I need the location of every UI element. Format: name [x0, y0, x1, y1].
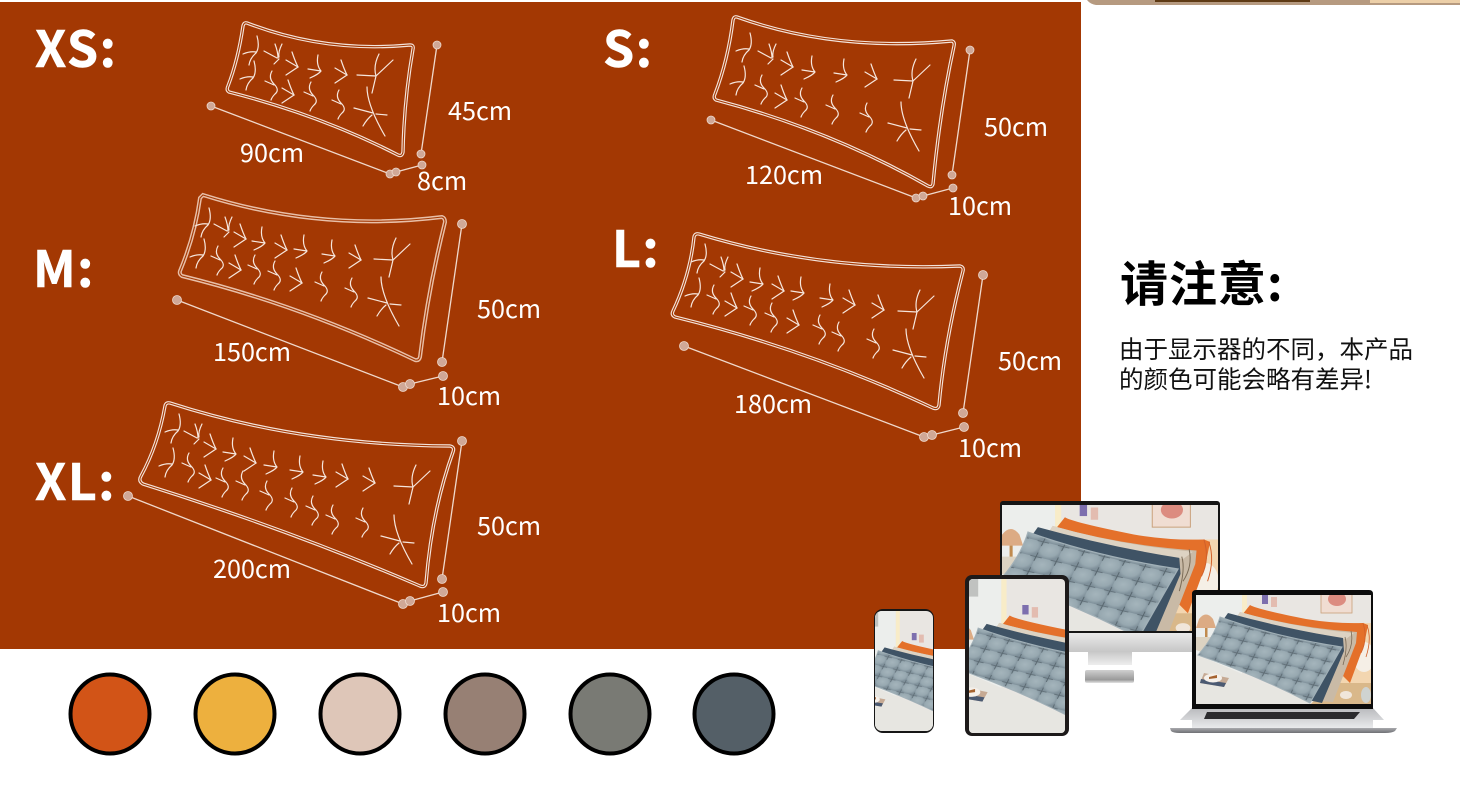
L depth label: 10cm [958, 429, 1022, 465]
colour swatches [70, 674, 774, 754]
notice body text: 由于显示器的不同，本产品 [1119, 331, 1413, 366]
S dimension lines [707, 46, 974, 202]
S length label: 120cm [745, 156, 823, 192]
orange size panel [0, 2, 1081, 649]
XL heading: XL: [35, 443, 116, 515]
laptop [1170, 590, 1397, 733]
XS height label: 45cm [448, 92, 512, 128]
notice body text: 的颜色可能会略有差异! [1119, 361, 1372, 396]
XL depth label: 10cm [437, 594, 501, 630]
XS pillow outline and tufts [227, 23, 413, 156]
XS heading: XS: [35, 10, 117, 82]
L pillow outline and tufts [672, 234, 963, 409]
S heading: S: [603, 10, 653, 82]
M height label: 50cm [477, 290, 541, 326]
XL length label: 200cm [213, 550, 291, 586]
M pillow outline and tufts [180, 195, 445, 360]
XS length label: 90cm [240, 134, 304, 170]
XS dimension lines [207, 41, 441, 178]
tablet [965, 575, 1069, 736]
phone [874, 609, 934, 733]
L height label: 50cm [998, 342, 1062, 378]
XL pillow outline and tufts [140, 403, 454, 587]
M dimension lines [172, 220, 466, 392]
notice heading: 请注意: [1120, 245, 1284, 315]
S pillow outline and tufts [714, 17, 954, 187]
M depth label: 10cm [437, 377, 501, 413]
L heading: L: [612, 210, 660, 282]
XS depth label: 8cm [417, 162, 467, 198]
XL height label: 50cm [477, 507, 541, 543]
S depth label: 10cm [948, 187, 1012, 223]
L length label: 180cm [734, 385, 812, 421]
cropped photo strip at top right [1087, 0, 1460, 5]
desktop monitor [1000, 501, 1220, 683]
L dimension lines [680, 270, 988, 442]
XL dimension lines [124, 436, 466, 608]
S height label: 50cm [984, 108, 1048, 144]
M heading: M: [33, 230, 95, 302]
M length label: 150cm [213, 333, 291, 369]
